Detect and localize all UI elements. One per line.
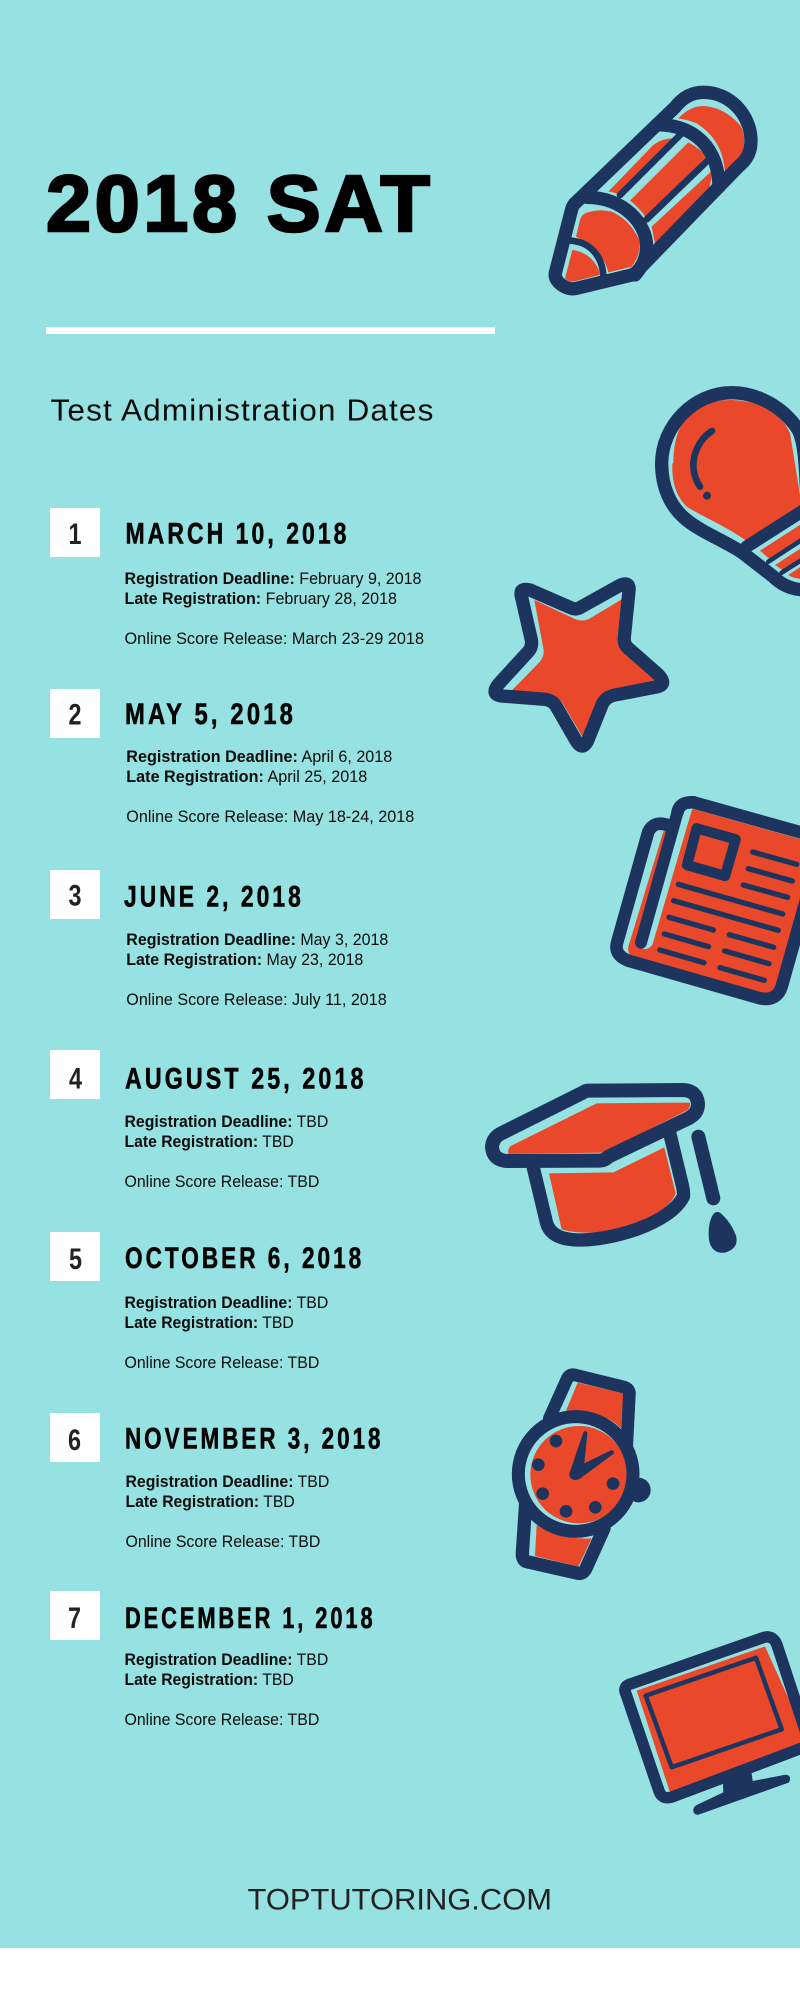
number badge 6: 6: [68, 1424, 81, 1457]
heading: November 3: NOVEMBER 3, 2018: [125, 1422, 384, 1456]
subtitle: Test Administration Dates: [50, 392, 434, 428]
number badge 5: [50, 1232, 100, 1281]
details 2: Registration Deadline: April 6, 2018: [126, 748, 392, 766]
details 3: [126, 931, 388, 1009]
footer website: TOPTUTORING.COM: [248, 1884, 552, 1916]
icon: newspaper: [616, 802, 800, 999]
details 4: Registration Deadline: TBD: [124, 1113, 328, 1131]
details 7: Online Score Release: TBD: [124, 1711, 319, 1729]
details 5: Late Registration: TBD: [124, 1314, 294, 1332]
icon: graduation cap: [492, 1090, 737, 1253]
details 6: Registration Deadline: TBD: [126, 1473, 329, 1491]
heading: May 5: MAY 5, 2018: [125, 698, 296, 731]
heading: October 6: OCTOBER 6, 2018: [125, 1242, 364, 1275]
number badge 1: [50, 508, 100, 557]
icon: pencil: [555, 92, 751, 289]
details 6: [126, 1473, 329, 1551]
details 1: [124, 570, 424, 648]
number badge 1: 1: [68, 518, 82, 551]
number badge 7: 7: [68, 1602, 81, 1635]
details 2: [126, 748, 414, 826]
details 5: [124, 1294, 328, 1372]
details 3: Registration Deadline: May 3, 2018: [126, 931, 388, 949]
number badge 2: 2: [68, 698, 82, 732]
number badge 7: [50, 1591, 100, 1640]
icon: light bulb: [662, 393, 800, 590]
date entry 6: [50, 1413, 384, 1551]
number badge 3: 3: [68, 880, 82, 912]
details 3: Online Score Release: July 11, 2018: [126, 991, 387, 1009]
number badge 2: [50, 689, 100, 738]
details 5: Online Score Release: TBD: [124, 1354, 319, 1372]
title: 2018 SAT: [46, 159, 433, 248]
heading: December 1: DECEMBER 1, 2018: [125, 1602, 376, 1635]
details 1: Registration Deadline: February 9, 2018: [124, 570, 422, 588]
icon: computer monitor: [625, 1637, 800, 1815]
number badge 6: [50, 1413, 100, 1462]
details 5: Registration Deadline: TBD: [124, 1294, 328, 1312]
heading: August 25: AUGUST 25, 2018: [125, 1062, 366, 1096]
details 7: Registration Deadline: TBD: [124, 1651, 328, 1669]
date entry 3: [50, 870, 388, 1009]
details 1: Online Score Release: March 23-29 2018: [124, 630, 424, 648]
date entry 7: [50, 1591, 376, 1729]
number badge 3: [50, 870, 100, 919]
heading: March 10: MARCH 10, 2018: [126, 517, 350, 550]
icon: star: [495, 584, 663, 746]
details 2: Online Score Release: May 18-24, 2018: [126, 808, 414, 826]
details 6: Late Registration: TBD: [126, 1493, 295, 1511]
details 6: Online Score Release: TBD: [126, 1533, 320, 1551]
heading: June 2: JUNE 2, 2018: [124, 880, 304, 913]
number badge 4: 4: [69, 1062, 82, 1096]
details 1: Late Registration: February 28, 2018: [124, 590, 397, 608]
details 4: Online Score Release: TBD: [124, 1173, 319, 1191]
details 2: Late Registration: April 25, 2018: [126, 768, 367, 786]
date entry 1: [50, 508, 424, 648]
date entry 5: [50, 1232, 364, 1372]
icon: wristwatch: [518, 1375, 651, 1573]
details 4: [124, 1113, 328, 1191]
title underline: [46, 327, 495, 334]
details 3: Late Registration: May 23, 2018: [126, 951, 363, 969]
date entry 2: [50, 689, 414, 826]
details 7: Late Registration: TBD: [124, 1671, 294, 1689]
details 7: [124, 1651, 328, 1729]
date entry 4: [50, 1050, 366, 1191]
details 4: Late Registration: TBD: [124, 1133, 294, 1151]
number badge 5: 5: [69, 1243, 82, 1276]
number badge 4: [50, 1050, 100, 1099]
